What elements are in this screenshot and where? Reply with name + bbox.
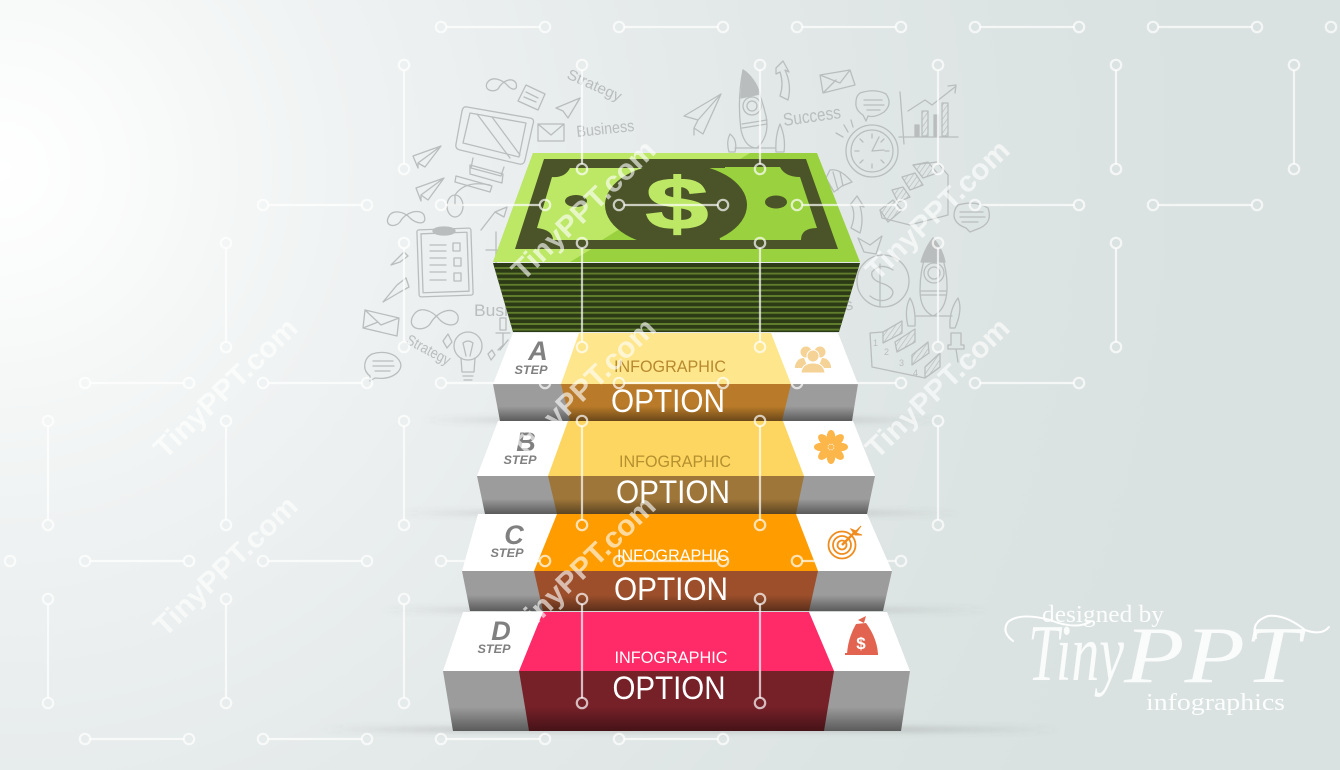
doodle: paper planes	[413, 146, 444, 201]
doodle: paper plane right	[684, 94, 721, 135]
stack of bills side	[490, 262, 862, 334]
step A	[493, 333, 858, 421]
step C	[462, 514, 892, 611]
floor shadows under the steps	[320, 418, 1060, 732]
doodle: words: Strategy	[564, 66, 625, 105]
doodle: crown of money bag	[826, 170, 852, 192]
doodle: infinity loops	[387, 79, 516, 329]
watermarks: TinyPPT.com	[506, 490, 662, 643]
icon: target	[828, 526, 862, 558]
text: option B: OPTION	[616, 474, 730, 510]
doodle: bar chart	[899, 85, 958, 144]
watermarks: TinyPPT.com	[148, 490, 304, 643]
doodle: envelope and bubble right	[820, 70, 889, 121]
icon: flower	[814, 430, 848, 464]
credit: PPT script: PPT	[1123, 612, 1307, 700]
doodle: clipboard	[417, 227, 473, 297]
credit: infographics: infographics	[1146, 690, 1285, 716]
doodle: words: Success	[782, 102, 842, 130]
doodle: curved arrows	[776, 61, 864, 233]
doodle: words: Busi	[474, 301, 508, 320]
step letter B: STEP	[504, 455, 537, 467]
credit: designed by: designed by	[1042, 602, 1164, 628]
doodle: rocket 2	[906, 238, 960, 328]
step letter A	[514, 336, 548, 377]
doodle: speech bubble right	[954, 203, 989, 232]
step letter D: D	[491, 616, 511, 646]
doodle: small hat pin	[496, 318, 510, 350]
text: infographic B: INFOGRAPHIC	[619, 453, 731, 471]
step letter C: C	[504, 520, 524, 550]
text: option D: OPTION	[612, 670, 726, 706]
doodle: podium stairs	[870, 321, 940, 378]
step letter A: A	[527, 336, 548, 366]
icon: team of people	[795, 346, 831, 373]
step D	[443, 612, 910, 731]
doodle: words: ss	[836, 296, 854, 316]
doodle: staircase top right	[880, 162, 948, 225]
dollar sign: $	[646, 164, 708, 245]
doodle: pins on left	[383, 252, 409, 302]
doodle: money bag centre right	[857, 236, 909, 307]
doodle: light bulb	[443, 332, 495, 380]
money stack	[490, 153, 862, 334]
watermarks: TinyPPT.com	[506, 312, 662, 465]
watermarks: TinyPPT.com	[860, 134, 1016, 287]
watermarks: TinyPPT.com	[506, 134, 662, 287]
credit: Tiny script: Tiny	[1028, 610, 1124, 698]
doodle: words: Business	[576, 118, 635, 141]
credit: T swashes	[1005, 616, 1329, 641]
doodle: words: Strategy	[403, 332, 454, 369]
bill light panels	[537, 168, 643, 240]
text: option A: OPTION	[611, 383, 725, 419]
watermarks: TinyPPT.com	[860, 312, 1016, 465]
step B	[477, 421, 875, 514]
step letter C	[490, 520, 524, 560]
doodle: words	[403, 66, 854, 369]
doodle: podium stairs: 3	[899, 358, 904, 368]
designer credit	[1005, 602, 1329, 716]
step letter B	[504, 427, 537, 467]
step letter C: STEP	[490, 548, 524, 560]
step letter B: B	[516, 427, 536, 457]
doodle: podium stairs: 2	[884, 347, 889, 357]
step letter D	[478, 616, 511, 656]
text: option C: OPTION	[614, 571, 728, 607]
text: infographic D: INFOGRAPHIC	[614, 649, 728, 667]
doodle: monitor	[455, 107, 534, 192]
text: infographic C: INFOGRAPHIC	[617, 547, 729, 565]
doodle: centre note and icons top	[518, 85, 580, 141]
doodle: mouse and pin	[447, 184, 510, 270]
doodle: envelope and bubble on left	[363, 310, 401, 381]
watermarks	[148, 134, 1016, 643]
doodle: push pin right	[948, 333, 964, 362]
doodle: podium stairs: 1	[873, 338, 878, 348]
watermarks: TinyPPT.com	[148, 312, 304, 465]
doodle: clock	[836, 120, 898, 177]
icon: money bag: $	[856, 634, 866, 653]
top bill	[493, 153, 860, 262]
doodle: podium stairs: 4	[913, 368, 918, 378]
step letter D: STEP	[478, 644, 511, 656]
doodle: rocket	[728, 70, 784, 152]
doodle sketches behind the money stack	[363, 61, 989, 381]
text: infographic A: INFOGRAPHIC	[614, 358, 726, 376]
step letter A: STEP	[514, 365, 548, 377]
icon: money bag	[845, 616, 878, 655]
